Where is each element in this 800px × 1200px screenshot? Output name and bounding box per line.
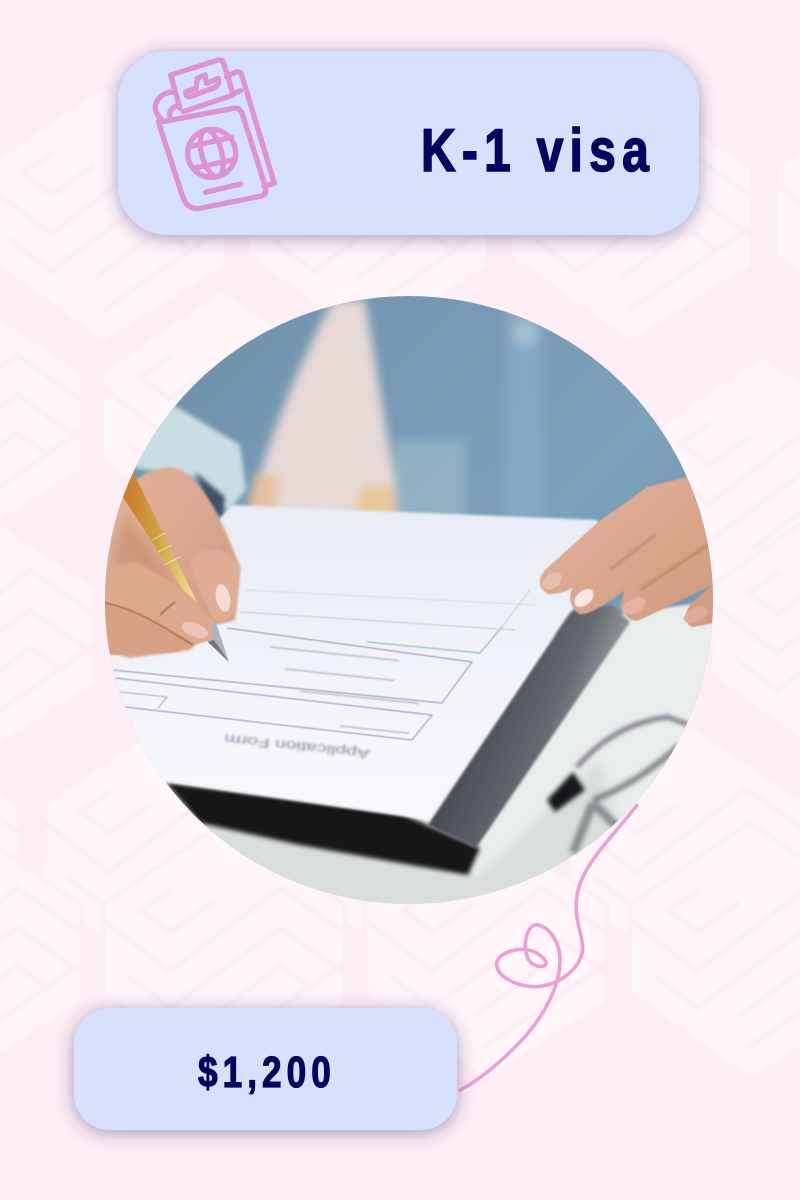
photo: hands filling in an application form: [100, 290, 720, 910]
title text: K-1 visa: [421, 117, 655, 184]
shirt opening: [245, 300, 543, 525]
writing hand: [100, 467, 240, 662]
binder spine: [428, 605, 630, 848]
thumb tip: [190, 550, 240, 622]
form paper: [100, 505, 615, 820]
index and middle fingers: [100, 563, 213, 645]
icon: passport with ticket: [155, 60, 274, 209]
pen: [123, 472, 197, 602]
price text: $1,200: [198, 1048, 336, 1097]
sleeve: [130, 400, 246, 512]
form title: Application Form: [224, 731, 370, 762]
glasses: [547, 717, 690, 853]
binder cover edge: [165, 782, 480, 875]
table: [152, 602, 713, 904]
swirl connector arrow from photo to price: [459, 804, 638, 1091]
pen tip: [208, 620, 229, 662]
price panel: [74, 1008, 457, 1130]
palm and thumb base: [100, 467, 240, 658]
resting hand: [539, 470, 720, 627]
title panel: [118, 51, 699, 235]
form lines: [113, 590, 535, 740]
